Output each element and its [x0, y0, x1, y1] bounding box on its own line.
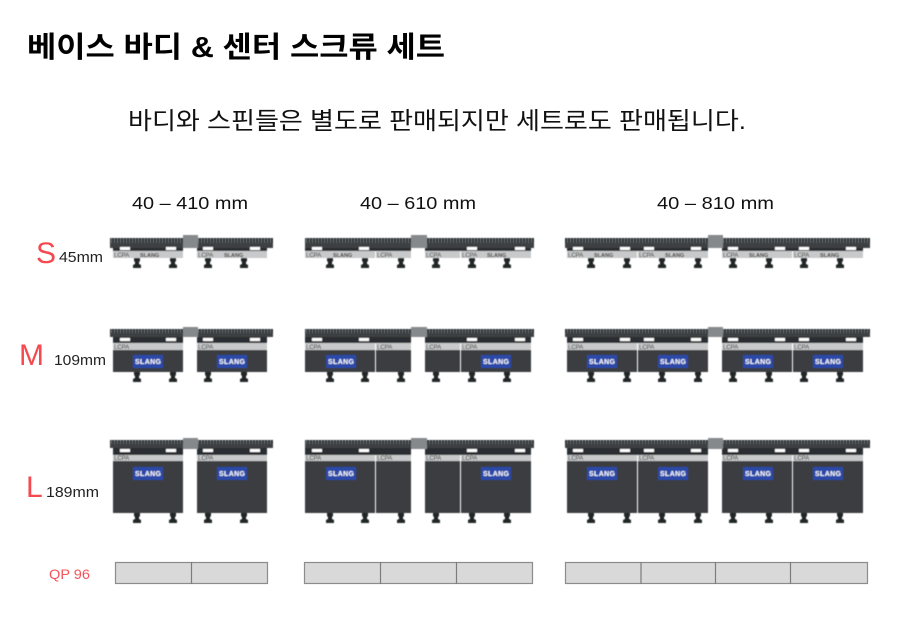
- range label: 40–810 mm: 40 – 810 mm: [657, 193, 774, 213]
- QP 96 label: QP 96: [49, 566, 90, 582]
- M 410 assembly: LCPA: [198, 345, 213, 351]
- S 410 assembly: SLANG: [224, 253, 243, 259]
- M 410 assembly: LCPA: [114, 345, 129, 351]
- S 610 assembly: LCPA: [306, 253, 321, 259]
- S 810 assembly: SLANG: [665, 253, 684, 259]
- M 810 assembly: LCPA: [794, 345, 809, 351]
- L 610 assembly: LCPA: [426, 456, 441, 462]
- M 810 assembly: SLANG: [745, 359, 772, 366]
- size label: L 189mm: 189mm: [46, 485, 99, 501]
- QP bar 610: [304, 562, 532, 584]
- M 610 assembly: LCPA: [462, 345, 477, 351]
- size label: S 45mm: [36, 237, 103, 270]
- L 410 assembly: SLANG: [219, 471, 246, 478]
- M 810 assembly: LCPA: [723, 345, 738, 351]
- L 610 assembly: LCPA: [306, 456, 321, 462]
- S 810 assembly: LCPA: [639, 253, 654, 259]
- L 610 assembly: SLANG: [328, 471, 355, 478]
- size label: L 189mm: L: [26, 471, 43, 504]
- M 410 assembly: [110, 327, 273, 382]
- L 610 assembly: LCPA: [462, 456, 477, 462]
- M 810 assembly: SLANG: [660, 359, 687, 366]
- M 610 assembly: LCPA: [426, 345, 441, 351]
- L 410 assembly: LCPA: [114, 456, 129, 462]
- L 410 assembly: LCPA: [198, 456, 213, 462]
- S 610 assembly: SLANG: [487, 253, 506, 259]
- QP bar 410: [116, 562, 268, 584]
- S 810 assembly: [565, 235, 870, 268]
- M 410 assembly: SLANG: [219, 359, 246, 366]
- range label: 40–410 mm: 40 – 410 mm: [132, 193, 248, 213]
- L 610 assembly: LCPA: [377, 456, 392, 462]
- S 610 assembly: [305, 235, 534, 268]
- S 810 assembly: LCPA: [568, 253, 583, 259]
- L 610 assembly: SLANG: [483, 471, 510, 478]
- L 610 assembly: [305, 438, 534, 523]
- M 610 assembly: [305, 327, 534, 382]
- size label: S 45mm: 45mm: [59, 250, 103, 266]
- S 610 assembly: SLANG: [333, 253, 352, 259]
- title: 베이스 바디 & 센터 스크류 세트: [27, 31, 445, 64]
- L 810 assembly: LCPA: [639, 456, 654, 462]
- M 610 assembly: SLANG: [483, 359, 510, 366]
- S 610 assembly: LCPA: [462, 253, 477, 259]
- subtitle: 바디와 스핀들은 별도로 판매되지만 세트로도 판매됩니다.: [128, 108, 746, 135]
- S 610 assembly: LCPA: [426, 253, 441, 259]
- M 610 assembly: LCPA: [306, 345, 321, 351]
- L 810 assembly: SLANG: [660, 471, 687, 478]
- L 810 assembly: [565, 438, 870, 523]
- size label: L 189mm: [26, 471, 99, 504]
- S 410 assembly: SLANG: [140, 253, 159, 259]
- M 610 assembly: LCPA: [377, 345, 392, 351]
- S 810 assembly: SLANG: [749, 253, 768, 259]
- M 410 assembly: SLANG: [135, 359, 162, 366]
- size label: M 109mm: M: [19, 339, 44, 372]
- S 810 assembly: LCPA: [723, 253, 738, 259]
- L 410 assembly: SLANG: [135, 471, 162, 478]
- L 810 assembly: LCPA: [723, 456, 738, 462]
- S 810 assembly: SLANG: [820, 253, 839, 259]
- L 810 assembly: LCPA: [794, 456, 809, 462]
- range label: 40–610 mm: 40 – 610 mm: [360, 193, 476, 213]
- size label: M 109mm: 109mm: [54, 353, 106, 369]
- L 410 assembly: [110, 438, 273, 523]
- QP bar 810: [566, 562, 868, 584]
- S 810 assembly: SLANG: [594, 253, 613, 259]
- M 810 assembly: [565, 327, 870, 382]
- S 410 assembly: LCPA: [198, 253, 213, 259]
- size label: S 45mm: S: [36, 237, 56, 270]
- M 810 assembly: SLANG: [589, 359, 616, 366]
- M 810 assembly: SLANG: [815, 359, 842, 366]
- M 810 assembly: LCPA: [639, 345, 654, 351]
- size label: M 109mm: [19, 339, 106, 372]
- L 810 assembly: LCPA: [568, 456, 583, 462]
- L 810 assembly: SLANG: [815, 471, 842, 478]
- M 610 assembly: SLANG: [328, 359, 355, 366]
- S 410 assembly: [110, 235, 273, 268]
- S 810 assembly: LCPA: [794, 253, 809, 259]
- M 810 assembly: LCPA: [568, 345, 583, 351]
- L 810 assembly: SLANG: [745, 471, 772, 478]
- L 810 assembly: SLANG: [589, 471, 616, 478]
- S 610 assembly: LCPA: [377, 253, 392, 259]
- S 410 assembly: LCPA: [114, 253, 129, 259]
